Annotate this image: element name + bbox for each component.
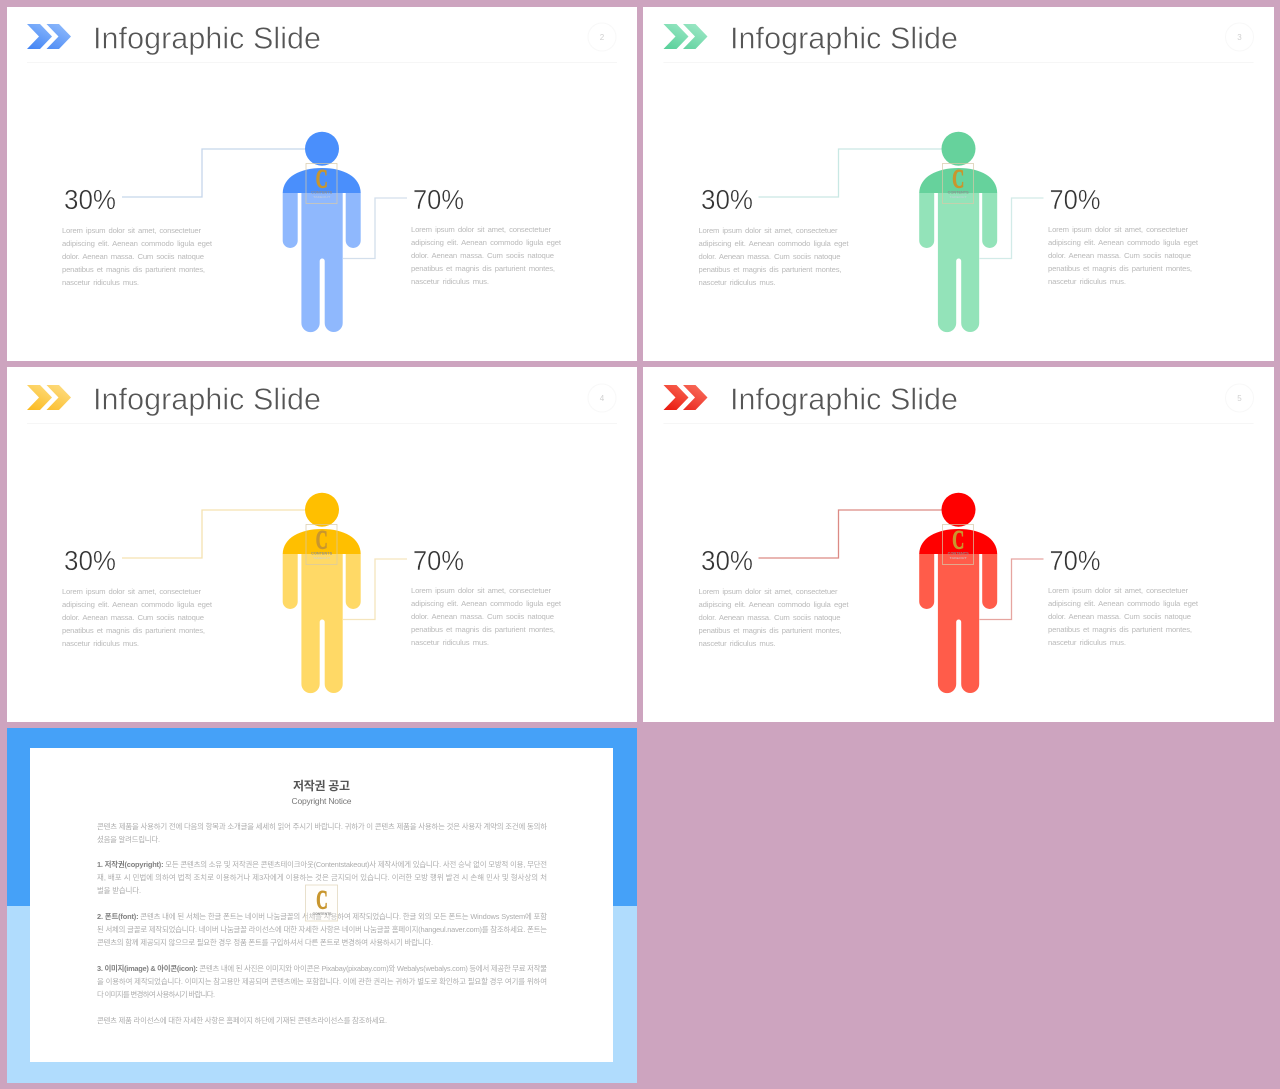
- text block: right description: nascetur ridiculus mus.: [411, 277, 489, 286]
- text block: image clause: 3. 이미지(image) & 아이콘(icon): 콘텐츠 내에 된 사진은 이미지와 아이콘은 Pixabay(pixabay.com)와 Webalys(webalys.com) 등에서 제공한 무료 저작물: [97, 964, 547, 973]
- panel: yellow slide: [7, 367, 637, 722]
- watermark logo: [306, 524, 337, 564]
- watermark logo: C: [316, 164, 328, 194]
- text block: left description: [62, 587, 213, 648]
- text block: left description: penatibus et magnis dis parturient montes,: [698, 626, 842, 635]
- watermark logo: CONTENTS: [311, 190, 333, 194]
- stat: 70 percent: 70%: [1050, 545, 1100, 576]
- text block: left description: dolor. Aenean massa. Cum sociis natoque: [62, 252, 204, 261]
- text block: font clause: 2. 폰트(font): 콘텐츠 내에 된 서체는 한글 폰트는 네이버 나눔글꼴의 서체를 사용하여 제작되었습니다. 한글 외의 모든 폰트는 Windows System에 포함: [97, 912, 547, 921]
- watermark logo: C: [952, 526, 964, 554]
- stat: 70 percent: 70%: [413, 184, 464, 215]
- text block: right description: adipiscing elit. Aenean commodo ligula eget: [411, 238, 562, 247]
- text block: right description: penatibus et magnis dis parturient montes,: [411, 264, 555, 273]
- text block: left description: [698, 226, 849, 287]
- text block: right description: adipiscing elit. Aenean commodo ligula eget: [1048, 238, 1199, 247]
- text block: right description: Lorem ipsum dolor sit amet, consectetuer: [411, 586, 551, 595]
- heading: copyright title: 저작권 공고: [293, 778, 350, 793]
- text block: right description: [411, 225, 562, 286]
- text block: left description: [62, 226, 213, 287]
- text block: right description: Lorem ipsum dolor sit amet, consectetuer: [411, 225, 551, 234]
- icon: yellow chevrons: [27, 385, 71, 410]
- text block: left description: penatibus et magnis dis parturient montes,: [698, 265, 842, 274]
- stat: 70 percent: 70%: [1050, 184, 1100, 215]
- text block: left description: dolor. Aenean massa. Cum sociis natoque: [698, 252, 840, 261]
- text block: copyright clause: 1. 저작권(copyright): 모든 콘텐츠의 소유 및 저작권은 콘텐츠테이크아웃(Contentstakeout)사 제작사에게 있습니다. 사전 승낙 없이 모방적 이용, 무단전: [97, 860, 547, 869]
- text block: left description: Lorem ipsum dolor sit amet, consectetuer: [62, 226, 201, 235]
- panel: green slide: [643, 7, 1274, 361]
- text block: left description: nascetur ridiculus mus.: [62, 278, 139, 287]
- connector: left line: [122, 149, 305, 197]
- heading: green slide title: Infographic Slide: [730, 22, 958, 56]
- stat: 30 percent: 30%: [64, 184, 116, 215]
- text block: right description: dolor. Aenean massa. Cum sociis natoque: [411, 612, 554, 621]
- text block: right description: penatibus et magnis dis parturient montes,: [1048, 625, 1192, 634]
- connector: right line: [980, 559, 1044, 620]
- page number 3: [1226, 23, 1254, 51]
- text block: left description: Lorem ipsum dolor sit amet, consectetuer: [62, 587, 201, 596]
- text block: copyright clause: [97, 860, 547, 895]
- text block: left description: penatibus et magnis dis parturient montes,: [62, 265, 205, 274]
- text block: left description: [698, 587, 849, 648]
- text block: right description: nascetur ridiculus mus.: [1048, 277, 1126, 286]
- figure: yellow person: [283, 493, 361, 693]
- figure: red person: [919, 493, 997, 693]
- heading: red slide title: Infographic Slide: [730, 383, 958, 417]
- page number 4: [588, 384, 616, 412]
- watermark logo: TAKEOUT: [950, 195, 967, 199]
- panel: blue slide: [7, 7, 637, 361]
- text block: right description: penatibus et magnis dis parturient montes,: [1048, 264, 1192, 273]
- text block: right description: dolor. Aenean massa. Cum sociis natoque: [1048, 251, 1191, 260]
- panel: red slide: [643, 367, 1274, 722]
- connector: left line: [758, 149, 942, 197]
- watermark logo: [306, 885, 338, 921]
- text block: right description: adipiscing elit. Aenean commodo ligula eget: [411, 599, 562, 608]
- text block: right description: dolor. Aenean massa. Cum sociis natoque: [1048, 612, 1191, 621]
- connector: left line: [122, 510, 305, 558]
- text block: image clause: 을 이용하여 제작되었습니다. 이미지는 참고용만 제공되며 콘텐츠에는 포함합니다. 이에 관한 권리는 귀하가 별도로 확인하고 필요할 경우 여기를 위하여: [97, 977, 547, 986]
- watermark logo: C: [316, 886, 328, 914]
- text block: left description: penatibus et magnis dis parturient montes,: [62, 626, 205, 635]
- text block: right description: nascetur ridiculus mus.: [1048, 638, 1126, 647]
- watermark logo: [942, 524, 974, 564]
- text block: right description: penatibus et magnis dis parturient montes,: [411, 625, 555, 634]
- page number 4: 4: [600, 394, 605, 403]
- page number 5: [1226, 384, 1254, 412]
- text block: intro: 셨음을 알려드립니다.: [97, 835, 160, 844]
- text block: right description: dolor. Aenean massa. Cum sociis natoque: [411, 251, 554, 260]
- text block: left description: dolor. Aenean massa. Cum sociis natoque: [62, 613, 204, 622]
- text block: right description: Lorem ipsum dolor sit amet, consectetuer: [1048, 586, 1188, 595]
- watermark logo: TAKEOUT: [313, 195, 330, 199]
- text block: left description: nascetur ridiculus mus.: [62, 639, 139, 648]
- text block: font clause: 콘텐츠의 함께 제공되지 않으므로 필요한 경우 정품 폰트를 구입하셔서 다른 폰트로 변경하여 사용하시기 바랍니다.: [97, 938, 433, 947]
- stat: 30 percent: 30%: [64, 545, 116, 576]
- subheading: copyright notice: Copyright Notice: [292, 796, 352, 806]
- text block: image clause: 다 이미지를 변경하여 사용하시기 바랍니다.: [97, 990, 215, 999]
- text block: left description: nascetur ridiculus mus.: [698, 278, 776, 287]
- watermark logo: CONTENTS: [311, 552, 333, 556]
- text block: right description: nascetur ridiculus mus.: [411, 638, 489, 647]
- text block: right description: Lorem ipsum dolor sit amet, consectetuer: [1048, 225, 1188, 234]
- watermark logo: CONTENTS: [948, 552, 969, 556]
- icon: blue chevrons: [27, 24, 71, 49]
- connector: right line: [980, 198, 1044, 258]
- stat: 70 percent: 70%: [413, 545, 464, 576]
- text block: image clause: [97, 964, 547, 999]
- figure: green person: [919, 132, 997, 332]
- text block: left description: adipiscing elit. Aenean commodo ligula eget: [62, 239, 213, 248]
- watermark logo: C: [952, 164, 964, 194]
- text block: right description: [1048, 586, 1199, 647]
- text block: closing line: 콘텐츠 제품 라이선스에 대한 자세한 사항은 홈페이지 하단에 기재된 콘텐츠라이선스를 참조하세요.: [97, 1016, 387, 1025]
- text block: left description: adipiscing elit. Aenean commodo ligula eget: [698, 600, 849, 609]
- watermark logo: [306, 164, 337, 204]
- text block: left description: Lorem ipsum dolor sit amet, consectetuer: [698, 226, 838, 235]
- text block: font clause: [97, 912, 547, 947]
- text block: left description: Lorem ipsum dolor sit amet, consectetuer: [698, 587, 838, 596]
- stat: 30 percent: 30%: [701, 184, 753, 215]
- page number 5: 5: [1237, 394, 1242, 403]
- heading: yellow slide title: Infographic Slide: [93, 383, 321, 417]
- page number 2: [588, 23, 616, 51]
- icon: red chevrons: [664, 385, 708, 410]
- icon: green chevrons: [664, 24, 708, 49]
- connector: right line: [343, 198, 407, 258]
- text block: left description: dolor. Aenean massa. Cum sociis natoque: [698, 613, 840, 622]
- watermark logo: TAKEOUT: [313, 556, 330, 560]
- text block: intro: [97, 822, 547, 844]
- text block: copyright clause: 벌을 받습니다.: [97, 886, 141, 895]
- watermark logo: [942, 164, 974, 204]
- heading: blue slide title: Infographic Slide: [93, 22, 321, 56]
- watermark logo: C: [316, 526, 328, 554]
- panel: copyright notice: [7, 728, 637, 1083]
- page number 3: 3: [1237, 33, 1242, 42]
- text block: left description: adipiscing elit. Aenean commodo ligula eget: [62, 600, 213, 609]
- text block: font clause: 된 서체의 글꼴로 제작되었습니다. 네이버 나눔글꼴 라이선스에 대한 자세한 사항은 네이버 나눔글꼴 홈페이지(hangeul.naver.com)를 참조하세요. 폰트는: [97, 925, 547, 934]
- page number 2: 2: [600, 33, 605, 42]
- connector: right line: [343, 559, 407, 620]
- watermark logo: CONTENTS: [312, 912, 332, 916]
- stat: 30 percent: 30%: [701, 545, 753, 576]
- text block: right description: [411, 586, 562, 647]
- text block: left description: nascetur ridiculus mus.: [698, 639, 776, 648]
- watermark logo: TAKEOUT: [950, 556, 967, 560]
- text block: right description: [1048, 225, 1199, 286]
- figure: blue person: [283, 132, 361, 332]
- text block: left description: adipiscing elit. Aenean commodo ligula eget: [698, 239, 849, 248]
- connector: left line: [758, 510, 942, 558]
- text block: right description: adipiscing elit. Aenean commodo ligula eget: [1048, 599, 1199, 608]
- text block: copyright clause: 재, 배포 시 민법에 의하여 법적 조치로 이용하거나 제3자에게 이용하는 것은 금지되어 있습니다. 이러한 모방 행위 발견 시 손해 민사 및 형사상의 처: [97, 873, 547, 882]
- text block: intro: 콘텐츠 제품을 사용하기 전에 다음의 항목과 소개글을 세세히 읽어 주시기 바랍니다. 귀하가 이 콘텐츠 제품을 사용하는 것은 사용자 계약의 조건에 동의하: [97, 822, 547, 831]
- watermark logo: CONTENTS: [948, 190, 969, 194]
